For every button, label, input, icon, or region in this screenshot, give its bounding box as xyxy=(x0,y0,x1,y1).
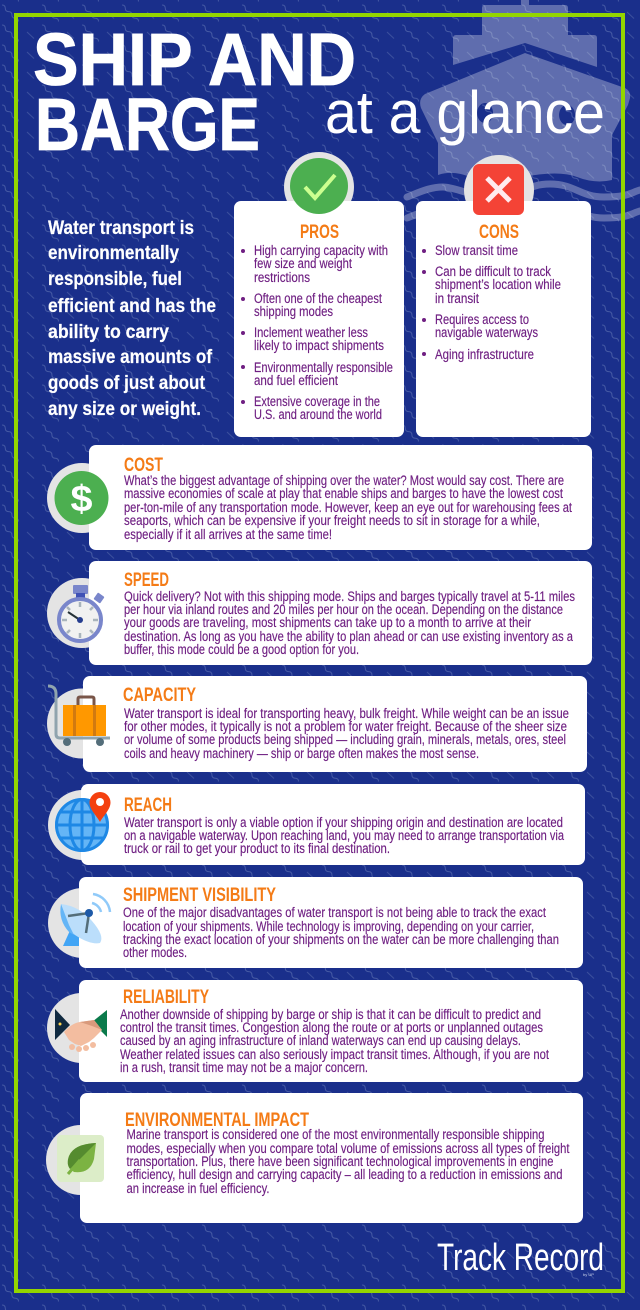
pros list: Extensive coverage in the xyxy=(254,394,380,409)
body: reliability: in a rush, transit time may not be a major concern. xyxy=(120,1060,368,1075)
body: capacity: for other modes, it typically is not a problem for water freight. Because of the sheer size xyxy=(124,719,567,734)
cons list xyxy=(422,243,561,362)
cons list: navigable waterways xyxy=(435,325,538,340)
pros list: restrictions xyxy=(254,270,310,285)
intro text: Water transport is xyxy=(48,218,194,239)
pros list: High carrying capacity with xyxy=(254,243,388,258)
icon: stopwatch xyxy=(59,585,105,641)
icon: cross xyxy=(473,164,524,215)
body: reliability: caused by an aging infrastructure of inland waterways can end up causing delays. xyxy=(120,1033,521,1048)
heading: reach: REACH xyxy=(124,795,172,816)
body: capacity xyxy=(124,706,569,761)
title xyxy=(33,18,605,166)
icon: handshake xyxy=(55,1009,107,1052)
intro text: massive amounts of xyxy=(48,347,213,368)
body: environmental impact: an increase in fuel efficiency. xyxy=(126,1181,270,1196)
pros list xyxy=(241,243,393,422)
panel: cons xyxy=(416,155,591,437)
body: reliability: Weather related issues can also seriously impact transit times. Although, if you are not xyxy=(120,1047,549,1062)
pros list: likely to impact shipments xyxy=(254,338,384,353)
title: at a glance xyxy=(325,79,605,146)
intro text: any size or weight. xyxy=(48,399,201,420)
cons list: shipment’s location while xyxy=(435,277,561,292)
icon: check xyxy=(290,158,348,214)
body: environmental impact xyxy=(126,1127,570,1196)
heading: environmental impact: ENVIRONMENTAL IMPACT xyxy=(125,1110,309,1131)
heading: cost: COST xyxy=(124,455,163,476)
cons list: Aging infrastructure xyxy=(435,347,534,362)
panel: reach xyxy=(48,784,585,865)
pros list: Inclement weather less xyxy=(254,325,368,340)
pros list: few size and weight xyxy=(254,256,352,271)
intro text: environmentally xyxy=(48,243,179,264)
panel: cost xyxy=(47,445,592,550)
body: speed xyxy=(124,589,575,657)
cons list: Slow transit time xyxy=(435,243,518,258)
body: cost: seaports, which can be expensive if your freight needs to sit in storage for a while, xyxy=(124,513,540,528)
pros list: Often one of the cheapest xyxy=(254,291,382,306)
body: cost: massive economies of scale at play that enable ships and barges to have the lowest cost xyxy=(124,486,563,501)
body: shipment visibility: One of the major disadvantages of water transport is not being able to track the exact xyxy=(123,905,546,920)
intro text xyxy=(48,218,216,420)
intro text: ability to carry xyxy=(48,322,169,343)
body: shipment visibility: tracking the exact location of your shipments on the water can be more challenging than xyxy=(123,932,559,947)
pros list: Environmentally responsible xyxy=(254,360,393,375)
icon: satellite dish xyxy=(60,894,110,946)
panel: shipment visibility xyxy=(48,877,583,968)
icon: dollar xyxy=(54,471,108,525)
logo: Track Record: by UP xyxy=(583,1272,594,1277)
heading: capacity: CAPACITY xyxy=(123,685,196,706)
icon: ship silhouette xyxy=(407,0,640,218)
heading: speed: SPEED xyxy=(124,570,169,591)
intro text: efficient and has the xyxy=(48,296,216,317)
body: reach: truck or rail to get your product to its final destination. xyxy=(124,841,390,856)
cons list: Requires access to xyxy=(435,312,529,327)
title: SHIP AND xyxy=(33,18,356,101)
heading: shipment visibility: SHIPMENT VISIBILITY xyxy=(123,885,276,906)
body: reliability: Another downside of shipping by barge or ship is that it can be difficult to predict and xyxy=(120,1007,541,1022)
body: environmental impact: efficiency, hull design and carrying capacity – all leading to a reduction in emissions and xyxy=(126,1167,562,1182)
cons list: Can be difficult to track xyxy=(435,264,551,279)
intro text: responsible, fuel xyxy=(48,269,182,290)
heading: reliability: RELIABILITY xyxy=(123,987,209,1008)
panel: environmental impact xyxy=(46,1093,583,1223)
icon: globe and pin xyxy=(55,792,110,852)
panel: pros xyxy=(234,152,404,437)
body: shipment visibility xyxy=(123,905,559,960)
body: reliability xyxy=(120,1007,549,1075)
icon: dollar: $ xyxy=(70,478,93,519)
heading: cons: CONS xyxy=(479,222,519,243)
panel: capacity xyxy=(47,676,587,772)
panel: speed xyxy=(47,561,592,665)
pros list: U.S. and around the world xyxy=(254,407,382,422)
body: environmental impact: transportation. Plus, there have been significant technological improvements in engine xyxy=(126,1154,554,1169)
body: capacity: Water transport is ideal for transporting heavy, bulk freight. While weight can be an issue xyxy=(124,706,569,721)
body: shipment visibility: location of your shipments. While technology is improving, depending on your carrier, xyxy=(123,919,534,934)
body: cost xyxy=(124,473,572,542)
body: reach: Water transport is only a viable option if your shipping origin and destination are located xyxy=(124,815,563,830)
panel: reliability xyxy=(47,980,583,1082)
pros list: shipping modes xyxy=(254,304,333,319)
body: speed: buffer, this mode could be a good option for you. xyxy=(124,642,359,657)
intro text: goods of just about xyxy=(48,373,206,394)
icon: leaf xyxy=(57,1135,104,1182)
title: BARGE xyxy=(35,83,260,166)
body: speed: your goods are traveling, most shipments can take up to a month to arrive at their xyxy=(124,615,531,630)
heading: pros: PROS xyxy=(300,222,339,243)
body: reach xyxy=(124,815,564,856)
body: reliability: control the transit times. Congestion along the route or at ports or unplanned outages xyxy=(120,1020,543,1035)
icon: luggage cart xyxy=(48,686,110,746)
body: shipment visibility: other modes. xyxy=(123,945,187,960)
body: capacity: coils and heavy machinery — ship or barge often makes the most sense. xyxy=(124,746,479,761)
body: environmental impact: Marine transport is considered one of the most environmentally responsible shipping xyxy=(126,1127,544,1142)
pros list: and fuel efficient xyxy=(254,373,338,388)
body: cost: especially if it all arrives at the same time! xyxy=(124,527,332,542)
cons list: in transit xyxy=(435,291,479,306)
